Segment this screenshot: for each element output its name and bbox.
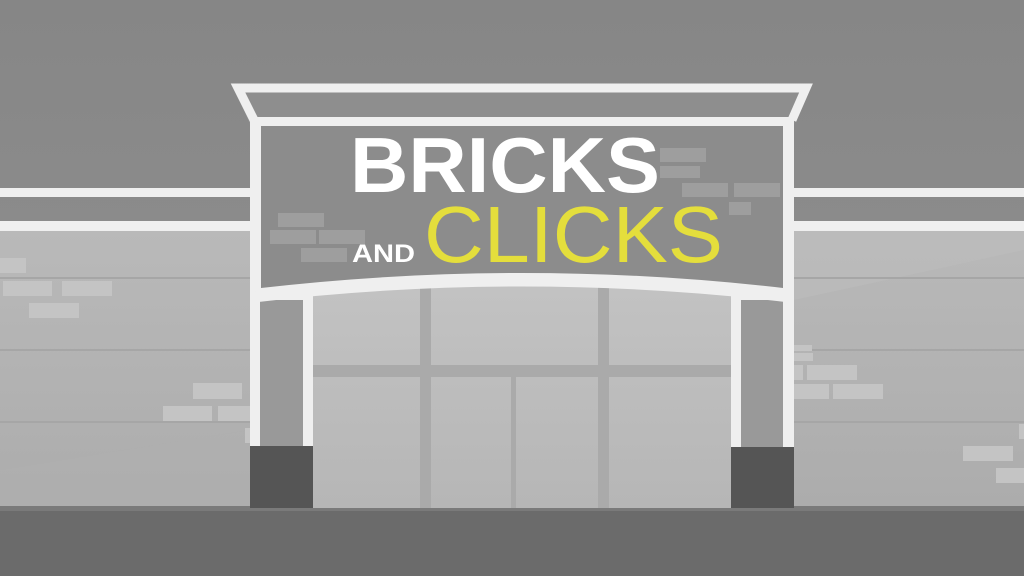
sign board xyxy=(250,117,794,300)
title: BRICKS: BRICKS xyxy=(350,121,660,209)
sign bottom curve overlay xyxy=(250,275,794,303)
wall bricks xyxy=(0,258,1024,483)
sign roof xyxy=(233,84,810,125)
title: CLICKS: CLICKS xyxy=(424,190,723,279)
left pillar xyxy=(250,290,313,508)
wall xyxy=(0,231,1024,508)
horizontal facade bands xyxy=(0,188,1024,231)
ground xyxy=(0,506,1024,576)
sign bricks xyxy=(270,148,780,262)
door / windows xyxy=(313,270,731,508)
right pillar xyxy=(731,290,794,508)
title: AND: AND xyxy=(352,240,415,268)
